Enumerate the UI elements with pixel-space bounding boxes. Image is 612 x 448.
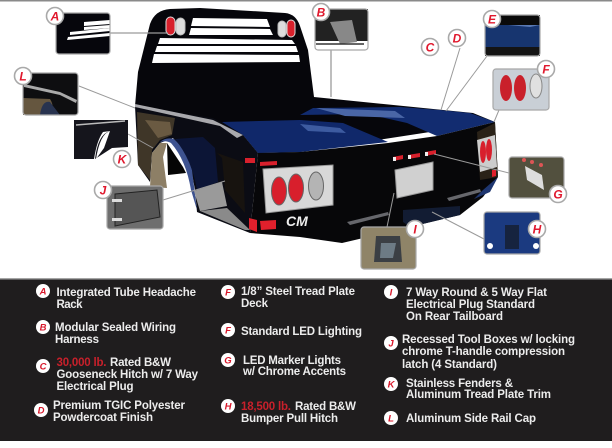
- legend column 3: Electrical Plug Standard: [406, 299, 535, 311]
- callout markers: C: [426, 40, 435, 54]
- flatbed truck body: [135, 8, 498, 243]
- legend column 1: Powdercoat Finish: [53, 412, 153, 424]
- callout markers: L: [19, 70, 27, 84]
- legend bullets: H: [225, 402, 233, 412]
- legend column 2: 1/8” Steel Tread Plate: [241, 286, 355, 298]
- legend column 3: On Rear Tailboard: [406, 311, 503, 323]
- legend column 1: Premium TGIC Polyester: [53, 400, 186, 412]
- legend bullets: L: [388, 414, 394, 424]
- right tail lights: [477, 135, 497, 172]
- legend column 1: [53, 287, 199, 424]
- legend column 2: 18,500 lb.: [241, 401, 291, 413]
- legend bullets: J: [388, 338, 394, 350]
- legend column 2: Deck: [241, 298, 269, 310]
- inset F: LED lights: [493, 69, 549, 110]
- legend column 3: 7 Way Round & 5 Way Flat: [406, 287, 547, 299]
- legend column 1: Gooseneck Hitch w/ 7 Way: [56, 369, 199, 381]
- legend column 1: 30,000 lb.: [56, 357, 106, 369]
- plate box: [395, 162, 433, 198]
- legend column 3: Aluminum Side Rail Cap: [406, 413, 536, 425]
- callout markers: E: [488, 12, 497, 26]
- legend panel: [0, 278, 612, 441]
- left deck lid: [222, 120, 388, 153]
- legend bullets: B: [40, 322, 47, 334]
- rear face: [250, 122, 498, 243]
- inset B: wiring harness: [315, 9, 368, 50]
- legend bullets: A: [39, 286, 47, 298]
- callout markers: [14, 4, 566, 238]
- inset H: bumper hitch: [484, 212, 540, 254]
- legend bullets: F: [225, 326, 231, 336]
- legend column 3: chrome T-handle compression: [402, 346, 565, 358]
- side rail cap: [135, 104, 243, 138]
- upper deck strip and right lid: [300, 107, 495, 136]
- rear steps: [347, 189, 481, 225]
- callout markers: A: [50, 10, 59, 24]
- legend column 3: latch (4 Standard): [402, 359, 497, 371]
- legend column 1: Rated B&W: [110, 357, 171, 369]
- legend column 2: Rated B&W: [295, 401, 356, 413]
- tread plate highlight: [316, 108, 405, 118]
- legend bullets: F: [225, 288, 231, 298]
- legend column 1: Harness: [55, 334, 99, 346]
- legend bullets: G: [224, 356, 232, 366]
- legend column 1: Electrical Plug: [56, 381, 134, 393]
- callout markers: J: [100, 184, 107, 198]
- legend column 2: LED Marker Lights: [243, 355, 341, 367]
- legend column 2: [241, 286, 362, 425]
- callout markers: K: [118, 152, 128, 166]
- legend bullets: I: [390, 288, 393, 298]
- legend column 1: Integrated Tube Headache: [56, 287, 196, 299]
- legend column 2: Bumper Pull Hitch: [241, 413, 338, 425]
- legend bullets: D: [38, 406, 45, 416]
- inset J: tool box door: [107, 186, 163, 229]
- legend bullets: [34, 284, 398, 425]
- inset K: fender: [74, 120, 128, 159]
- legend column 1: Rack: [56, 299, 83, 311]
- legend column 1: Modular Sealed Wiring: [55, 322, 176, 334]
- callout markers: G: [553, 188, 563, 202]
- callout markers: H: [533, 222, 542, 236]
- legend column 3: Aluminum Tread Plate Trim: [406, 389, 551, 401]
- legend bullets: C: [40, 362, 47, 372]
- side body and fender: [135, 106, 258, 233]
- leader lines: [79, 33, 509, 239]
- headache rack: [135, 8, 495, 153]
- rear logo: CM: [286, 213, 308, 229]
- marker lights: [245, 150, 436, 166]
- callout markers: B: [317, 6, 326, 20]
- inset E: tread plate: [485, 15, 540, 56]
- inset I: electrical plug: [361, 227, 416, 269]
- inset L: rail cap: [23, 73, 78, 115]
- legend column 3: Recessed Tool Boxes w/ locking: [402, 334, 575, 346]
- legend column 2: Standard LED Lighting: [241, 326, 362, 338]
- legend column 3: Stainless Fenders &: [406, 378, 513, 390]
- callout markers: I: [413, 222, 417, 236]
- callout markers: F: [542, 62, 550, 76]
- inset G: marker lights: [509, 157, 564, 198]
- legend column 3: [402, 287, 575, 425]
- inset A: rack: [56, 13, 110, 54]
- legend bullets: K: [388, 380, 396, 390]
- legend column 2: w/ Chrome Accents: [242, 366, 346, 378]
- callout markers: D: [453, 32, 462, 46]
- left tail light box: [263, 165, 333, 213]
